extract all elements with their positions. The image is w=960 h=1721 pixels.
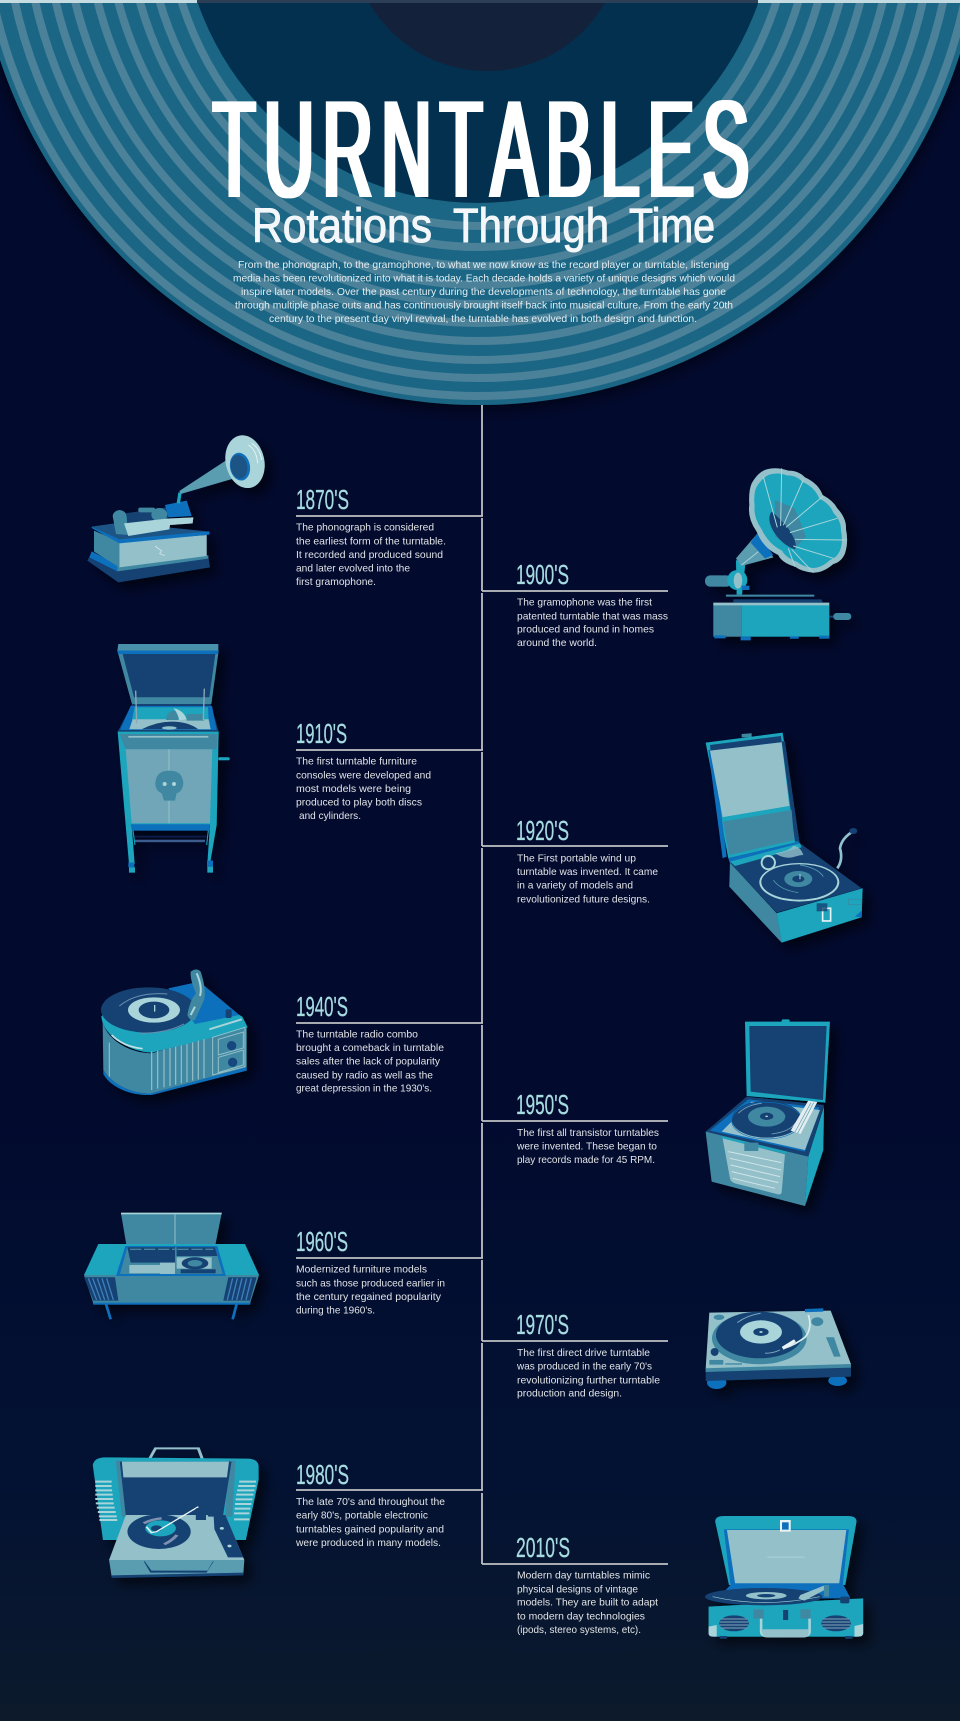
- entry: 1960s: 1960'S: [296, 1226, 348, 1257]
- entry: 1920s: [516, 815, 658, 905]
- entry: 1960s: the century regained popularity: [296, 1292, 442, 1303]
- icon: 1970s direct drive: [706, 1310, 851, 1389]
- entry: 1950s: The first all transistor turntables: [517, 1128, 659, 1139]
- entry: 1910s: [296, 718, 431, 822]
- entry: 1960s: during the 1960's.: [296, 1305, 375, 1316]
- entry: 1940s: The turntable radio combo: [296, 1029, 418, 1040]
- entry: 1900s: produced and found in homes: [517, 625, 654, 636]
- icon: 1940s radio combo: [101, 969, 248, 1095]
- entry: 1940s: sales after the lack of popularity: [296, 1057, 441, 1068]
- entry: 1900s: [516, 559, 668, 649]
- entry: 1870s: and later evolved into the: [296, 563, 410, 574]
- entry: 1950s: [516, 1089, 659, 1166]
- entry: 1900s: around the world.: [517, 638, 597, 649]
- vinyl record header: [0, 0, 960, 405]
- entry: 1980s: early 80's, portable electronic: [296, 1511, 428, 1522]
- entry: 1970s: was produced in the early 70's: [516, 1362, 652, 1373]
- entry: 1970s: 1970'S: [516, 1309, 569, 1340]
- entry: 2010s: (ipods, stereo systems, etc).: [517, 1625, 641, 1636]
- entry: 1920s: turntable was invented. It came: [517, 867, 658, 878]
- entry: 1870s: The phonograph is considered: [296, 523, 434, 534]
- entry: 1940s: great depression in the 1930's.: [296, 1084, 432, 1095]
- entry: 1980s: The late 70's and throughout the: [296, 1497, 445, 1508]
- entry: 1870s: 1870'S: [296, 484, 349, 515]
- icon: 1960s console: [84, 1213, 259, 1319]
- entry: 1940s: caused by radio as well as the: [296, 1070, 433, 1081]
- entry: 1910s: produced to play both discs: [296, 798, 422, 809]
- intro paragraph: through multiple phase outs and has continuously brought itself back into musical culture. From the early 20th: [235, 300, 733, 312]
- entry: 1970s: production and design.: [517, 1389, 622, 1400]
- entry: 1970s: [516, 1309, 660, 1400]
- entry: 1950s: play records made for 45 RPM.: [517, 1155, 655, 1166]
- entry: 1910s: consoles were developed and: [296, 770, 431, 781]
- icon: 1900s gramophone: [705, 468, 851, 640]
- intro paragraph: [233, 259, 735, 325]
- subtitle: [252, 200, 715, 253]
- icon: 1950s box player: [706, 1019, 830, 1206]
- title: TURNTABLES: [213, 73, 758, 227]
- entry: 2010s: 2010'S: [516, 1532, 570, 1563]
- entry: 2010s: models. They are built to adapt: [517, 1598, 658, 1609]
- entry: 1940s: 1940'S: [296, 991, 348, 1022]
- entry: 1870s: [296, 484, 446, 588]
- entry: 2010s: [516, 1532, 658, 1636]
- intro paragraph: inspire later models. Over the past century during the developments of technology, the turntable has gone: [241, 286, 726, 298]
- entry: 1970s: revolutionizing further turntable: [517, 1375, 660, 1386]
- icon: 1980s portable: [93, 1448, 259, 1578]
- entry: 1940s: [296, 991, 444, 1095]
- entry: 1980s: 1980'S: [296, 1459, 349, 1490]
- icon: 1920s portable: [706, 733, 863, 943]
- entry: 1910s: The first turntable furniture: [296, 757, 417, 768]
- entry: 1900s: The gramophone was the first: [517, 598, 652, 609]
- entry: 1870s: It recorded and produced sound: [296, 550, 443, 561]
- entry: 1960s: [296, 1226, 445, 1316]
- entry: 2010s: physical designs of vintage: [517, 1584, 638, 1595]
- intro paragraph: media has been revolutionized into what it is today. Each decade holds a variety of unique designs which would: [233, 273, 735, 285]
- entry: 1920s: 1920'S: [516, 815, 569, 846]
- icon: 1910s console: [117, 644, 230, 873]
- entry: 1900s: patented turntable that was mass: [517, 611, 668, 622]
- entry: 1960s: such as those produced earlier in: [296, 1278, 445, 1289]
- entry: 1920s: revolutionized future designs.: [517, 894, 650, 905]
- icon: 2010s suitcase player: [705, 1516, 863, 1639]
- entry: 1920s: in a variety of models and: [517, 881, 633, 892]
- entry: 1970s: The first direct drive turntable: [517, 1348, 650, 1359]
- entry: 1980s: were produced in many models.: [295, 1538, 441, 1549]
- entry: 2010s: Modern day turntables mimic: [517, 1571, 650, 1582]
- entry: 1910s: most models were being: [296, 784, 411, 795]
- subtitle: Through: [453, 200, 609, 253]
- entry: 1900s: 1900'S: [516, 559, 569, 590]
- timeline axis: [296, 405, 668, 1564]
- entry: 1910s: and cylinders.: [299, 811, 361, 822]
- entry: 1980s: turntables gained popularity and: [296, 1524, 444, 1535]
- subtitle: Rotations: [252, 200, 432, 253]
- entry: 1870s: first gramophone.: [296, 577, 376, 588]
- entry: 1960s: Modernized furniture models: [296, 1265, 427, 1276]
- subtitle: Time: [629, 200, 715, 253]
- entry: 1950s: were invented. These began to: [516, 1142, 657, 1153]
- intro paragraph: From the phonograph, to the gramophone, to what we now know as the record player or turntable, listening: [238, 259, 729, 271]
- entry: 1940s: brought a comeback in turntable: [296, 1043, 444, 1054]
- entry: 1870s: the earliest form of the turntable.: [296, 536, 446, 547]
- icon: 1870s phonograph: [87, 432, 269, 582]
- entry: 1950s: 1950'S: [516, 1089, 569, 1120]
- entry: 1920s: The First portable wind up: [517, 854, 636, 865]
- entry: 1980s: [295, 1459, 445, 1549]
- entry: 1910s: 1910'S: [296, 718, 347, 749]
- entry: 2010s: to modern day technologies: [517, 1611, 645, 1622]
- intro paragraph: century to the present day vinyl revival, the turntable has evolved in both design and function.: [269, 313, 697, 325]
